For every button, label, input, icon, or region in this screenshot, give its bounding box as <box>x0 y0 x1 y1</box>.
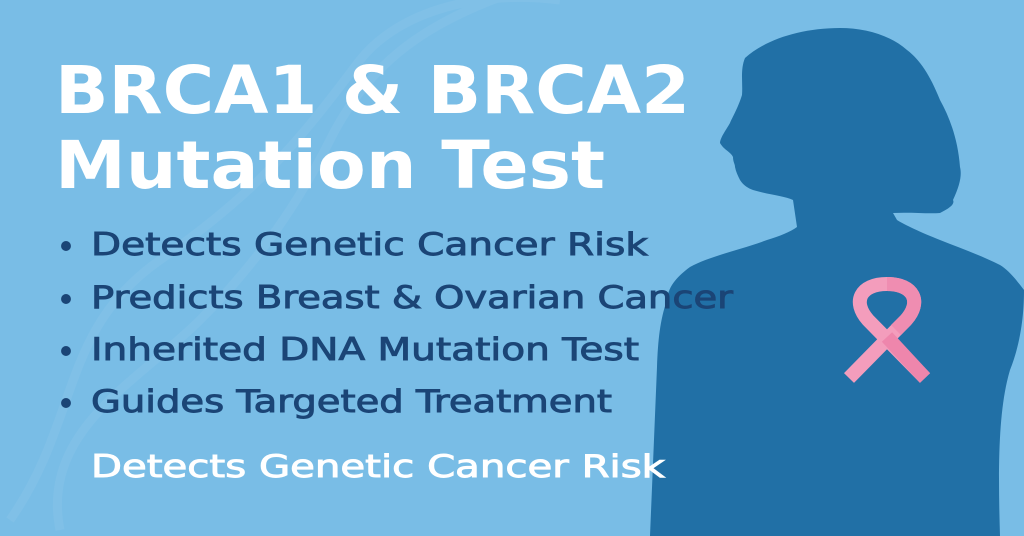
woman silhouette <box>650 28 1024 536</box>
title: BRCA1 & BRCA2 <box>55 52 690 129</box>
bullet list <box>62 227 733 420</box>
title <box>55 52 690 204</box>
footer tagline: Detects Genetic Cancer Risk <box>91 449 665 485</box>
icon: pink ribbon <box>849 284 925 378</box>
bullet 1: Detects Genetic Cancer Risk <box>91 227 648 263</box>
title: Mutation Test <box>55 127 605 204</box>
decorative dna helix <box>10 0 560 530</box>
bullet 2: Predicts Breast & Ovarian Cancer <box>91 280 733 316</box>
bullet 4: Guides Targeted Treatment <box>91 384 612 420</box>
bullet 3: Inherited DNA Mutation Test <box>91 332 639 368</box>
